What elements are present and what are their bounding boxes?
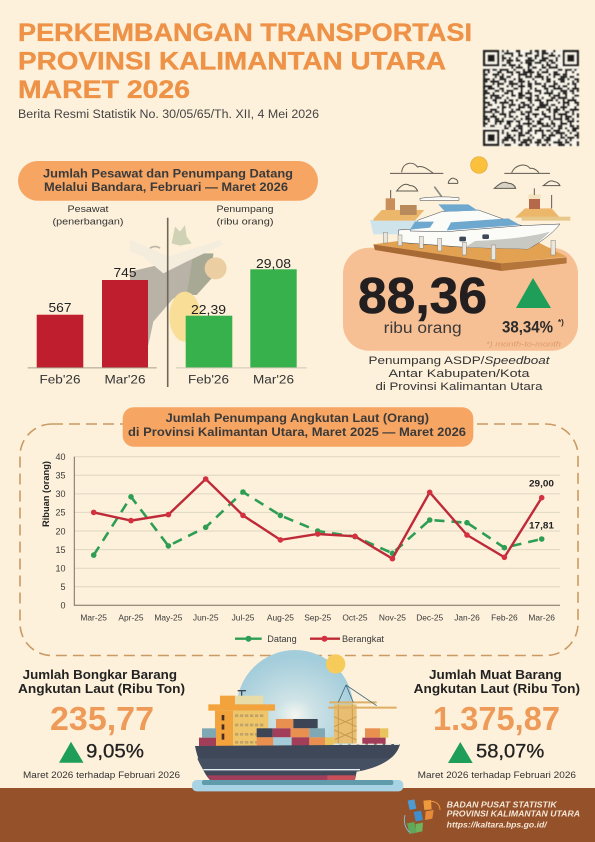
icon: sun <box>326 654 345 674</box>
hull <box>195 744 400 780</box>
caption: speedboat passengers: Penumpang ASDP/ Speedboat <box>368 355 551 367</box>
stat: unloading goods: Angkutan Laut (Ribu Ton) <box>18 682 185 696</box>
x axis labels: Mar-26 <box>528 613 555 623</box>
y axis labels <box>55 452 66 611</box>
x axis labels: Jun-25 <box>193 613 219 623</box>
stat: loading goods: Angkutan Laut (Ribu Ton) <box>414 682 580 696</box>
footer band <box>0 788 595 842</box>
data labels: 29,00 <box>529 479 554 489</box>
x axis labels: May-25 <box>154 613 183 623</box>
line chart: sea passengers <box>41 452 560 644</box>
x axis labels: Aug-25 <box>267 613 294 623</box>
icon: sun <box>471 157 487 173</box>
data labels <box>529 479 554 530</box>
x axis labels: Feb-26 <box>491 613 518 623</box>
data labels: 17,81 <box>529 520 554 530</box>
bar chart: aircraft: Pesawat <box>68 204 109 215</box>
x axis labels: Apr-25 <box>118 613 144 623</box>
value: 1.375,87 <box>433 700 560 737</box>
footer text: https://kaltara.bps.go.id/ <box>447 820 548 829</box>
footer text <box>447 800 580 829</box>
divider <box>167 218 169 387</box>
dock <box>373 241 567 263</box>
change: 58,07% <box>476 742 544 763</box>
x axis labels: Oct-25 <box>342 613 368 623</box>
dome <box>237 650 353 755</box>
bar chart: aircraft: Feb'26 <box>40 374 80 386</box>
percent change: 38,34% <box>502 318 553 336</box>
icon: up triangle <box>59 742 84 763</box>
y axis labels: 0 <box>60 601 66 611</box>
bar chart: aircraft: Mar'26 <box>104 374 146 386</box>
panel: dashed frame of sea transport chart <box>20 424 578 656</box>
QR code <box>483 50 579 146</box>
water base <box>192 780 403 791</box>
subtitle: Berita Resmi Statistik No. 30/05/65/Th. XII, 4 Mei 2026 <box>18 109 319 121</box>
heading pill: sea passengers: di Provinsi Kalimantan Utara, Maret 2025 — Maret 2026 <box>128 425 466 439</box>
change: 9,05% <box>86 742 144 763</box>
superstructure <box>208 690 275 747</box>
caption: speedboat passengers <box>368 355 551 393</box>
x axis labels: Sep-25 <box>304 613 332 623</box>
value: 235,77 <box>50 700 154 737</box>
y axis labels: 15 <box>55 545 66 555</box>
x axis labels: Dec-25 <box>416 613 444 623</box>
x axis labels: Jul-25 <box>232 613 255 623</box>
period: Maret 2026 terhadap Februari 2026 <box>23 770 180 780</box>
legend: Berangkat <box>342 634 385 644</box>
legend <box>235 634 385 644</box>
stat: unloading goods: Jumlah Bongkar Barang <box>23 668 177 682</box>
y axis labels: 30 <box>55 489 66 499</box>
title: MARET 2026 <box>18 76 190 104</box>
bar chart: aircraft <box>28 204 157 386</box>
stat: unloading goods <box>18 668 185 780</box>
stat: loading goods <box>414 668 580 780</box>
footnote mark: *) <box>558 318 564 327</box>
x axis labels: Mar-25 <box>80 613 107 623</box>
bar chart: passengers: Feb'26 <box>188 374 229 386</box>
icon: up triangle <box>516 278 551 308</box>
period: Maret 2026 terhadap Februari 2026 <box>418 770 576 780</box>
faded background illustration: plane and tropical items <box>130 225 227 345</box>
y axis labels: 25 <box>55 508 66 518</box>
bar chart: passengers: 22,39 <box>191 303 226 317</box>
icon: up triangle <box>448 742 473 763</box>
mooring posts <box>383 232 555 260</box>
background boats <box>370 220 422 234</box>
stat: loading goods: Jumlah Muat Barang <box>429 668 562 682</box>
heading pill: aircraft and passengers: Jumlah Pesawat dan Penumpang Datang <box>43 166 293 180</box>
heading pill: sea passengers <box>123 407 473 447</box>
clouds <box>390 163 560 191</box>
title <box>18 19 472 104</box>
containers <box>199 719 388 746</box>
caption: speedboat passengers: di Provinsi Kalimantan Utara <box>376 381 544 393</box>
y axis labels: 35 <box>55 471 66 481</box>
series: Berangkat <box>91 476 544 562</box>
bar chart: passengers: (ribu orang) <box>216 216 274 228</box>
caption: speedboat passengers: Antar Kabupaten/Kota <box>388 368 531 380</box>
heading pill: sea passengers: Jumlah Penumpang Angkutan Laut (Orang) <box>166 411 429 425</box>
illustration: container ship <box>192 650 403 791</box>
title: PERKEMBANGAN TRANSPORTASI <box>18 19 472 47</box>
yacht hull <box>398 223 560 249</box>
big number: 88,36 <box>358 267 487 324</box>
bar chart: aircraft: (penerbangan) <box>52 216 124 228</box>
footer text: PROVINSI KALIMANTAN UTARA <box>447 810 580 819</box>
y axis title: Ribuan (orang) <box>41 461 51 527</box>
bar chart: aircraft: 567 <box>48 301 72 315</box>
y axis labels: 40 <box>55 452 66 462</box>
series: Datang <box>91 489 544 558</box>
legend: Datang <box>267 634 297 644</box>
illustration: yacht at dock <box>370 157 570 271</box>
bar chart: aircraft: 745 <box>114 266 137 280</box>
panel: speedboat passengers <box>343 248 578 351</box>
footer text: BADAN PUSAT STATISTIK <box>447 800 558 809</box>
bar chart: passengers <box>176 204 307 386</box>
heading pill: aircraft and passengers <box>18 161 318 201</box>
crane <box>328 685 397 743</box>
x axis labels <box>80 613 555 623</box>
unit: ribu orang <box>384 320 462 337</box>
logo: BPS <box>404 799 440 834</box>
x axis labels: Nov-25 <box>379 613 406 623</box>
x axis labels: Jan-26 <box>454 613 480 623</box>
y axis labels: 5 <box>60 582 66 592</box>
bar chart: passengers: Penumpang <box>216 204 274 215</box>
title: PROVINSI KALIMANTAN UTARA <box>18 48 446 76</box>
footnote: *) month-to-month <box>486 340 561 349</box>
bar chart: passengers: Mar'26 <box>253 374 294 386</box>
heading pill: aircraft and passengers: Melalui Bandara, Februari — Maret 2026 <box>44 180 288 194</box>
y axis labels: 10 <box>55 564 66 574</box>
bar chart: passengers: 29,08 <box>256 257 291 271</box>
y axis labels: 20 <box>55 526 66 536</box>
